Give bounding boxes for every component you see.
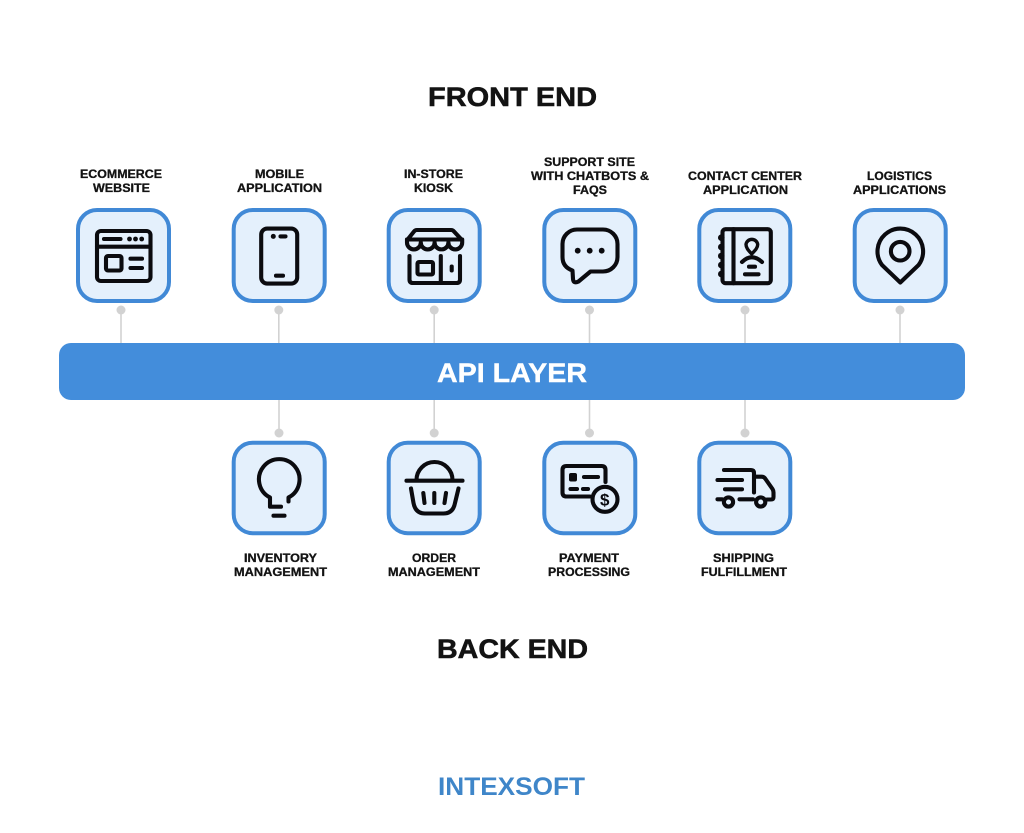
label: payment processing: PAYMENT bbox=[559, 551, 620, 565]
title: back end: BACK END bbox=[437, 634, 588, 664]
icon box: card with dollar coin: $ bbox=[600, 490, 610, 510]
label: ecommerce website bbox=[80, 167, 162, 195]
panel: order management bbox=[388, 400, 481, 579]
label: logistics applications bbox=[853, 169, 946, 197]
panel: ecommerce website bbox=[78, 167, 169, 343]
label: payment processing: PROCESSING bbox=[548, 565, 630, 579]
panel: contact center bbox=[688, 169, 802, 343]
connector bbox=[430, 400, 439, 438]
icon box: speech bubble bbox=[544, 210, 635, 301]
label: order management: ORDER bbox=[412, 551, 456, 565]
panel: in-store kiosk bbox=[389, 167, 480, 343]
icon box: smartphone bbox=[234, 210, 325, 301]
label: support site with chatbots and faqs: SUPPORT SITE bbox=[544, 155, 635, 169]
icon box: light bulb bbox=[234, 443, 325, 533]
label: payment processing bbox=[548, 551, 630, 579]
icon box: delivery truck bbox=[699, 443, 790, 533]
connector bbox=[740, 306, 750, 343]
panel: logistics applications bbox=[853, 169, 946, 343]
label: contact center application: APPLICATION bbox=[703, 183, 788, 197]
label: ecommerce website: ECOMMERCE bbox=[80, 167, 162, 181]
label: inventory management: MANAGEMENT bbox=[234, 565, 328, 579]
panel: payment processing bbox=[544, 400, 635, 579]
label: shipping fulfillment: SHIPPING bbox=[713, 551, 774, 565]
logo: intexsoft: INTEXSOFT bbox=[438, 773, 585, 801]
label: in-store kiosk bbox=[404, 167, 463, 195]
label: order management: MANAGEMENT bbox=[388, 565, 481, 579]
connector bbox=[740, 400, 750, 438]
label: support site with chatbots and faqs bbox=[531, 155, 649, 197]
api layer bar: API LAYER bbox=[437, 358, 587, 388]
connector bbox=[896, 306, 904, 343]
label: ecommerce website: WEBSITE bbox=[93, 181, 150, 195]
label: in-store kiosk: KIOSK bbox=[414, 181, 453, 195]
label: logistics applications: LOGISTICS bbox=[867, 169, 932, 183]
icon box: map pin bbox=[855, 210, 946, 301]
label: contact center application: CONTACT CENTER bbox=[688, 169, 802, 183]
label: contact center application bbox=[688, 169, 802, 197]
connector bbox=[430, 306, 439, 343]
label: mobile application bbox=[237, 167, 322, 195]
label: inventory management: INVENTORY bbox=[244, 551, 317, 565]
label: in-store kiosk: IN-STORE bbox=[404, 167, 463, 181]
connector bbox=[585, 400, 594, 438]
label: support site with chatbots and faqs: WITH CHATBOTS & bbox=[531, 169, 649, 183]
label: logistics applications: APPLICATIONS bbox=[853, 183, 946, 197]
panel: mobile application bbox=[234, 167, 325, 343]
title: front end: FRONT END bbox=[428, 82, 597, 112]
icon box: basket bbox=[389, 443, 480, 533]
label: mobile application: MOBILE bbox=[255, 167, 304, 181]
connector bbox=[116, 306, 126, 343]
panel: inventory management bbox=[234, 400, 328, 579]
label: support site with chatbots and faqs: FAQS bbox=[573, 183, 607, 197]
connector bbox=[274, 306, 283, 343]
label: mobile application: APPLICATION bbox=[237, 181, 322, 195]
icon box: browser window bbox=[78, 210, 169, 301]
connector bbox=[585, 306, 594, 343]
connector bbox=[274, 400, 284, 438]
panel: shipping fulfillment bbox=[699, 400, 790, 579]
label: shipping fulfillment: FULFILLMENT bbox=[701, 565, 788, 579]
label: order management bbox=[388, 551, 481, 579]
icon box: storefront bbox=[389, 210, 480, 301]
label: shipping fulfillment bbox=[701, 551, 788, 579]
icon box: card with dollar coin bbox=[544, 443, 635, 533]
api layer bar bbox=[59, 343, 965, 400]
label: inventory management bbox=[234, 551, 328, 579]
icon box: contact book bbox=[699, 210, 790, 301]
panel: support site bbox=[531, 155, 649, 343]
